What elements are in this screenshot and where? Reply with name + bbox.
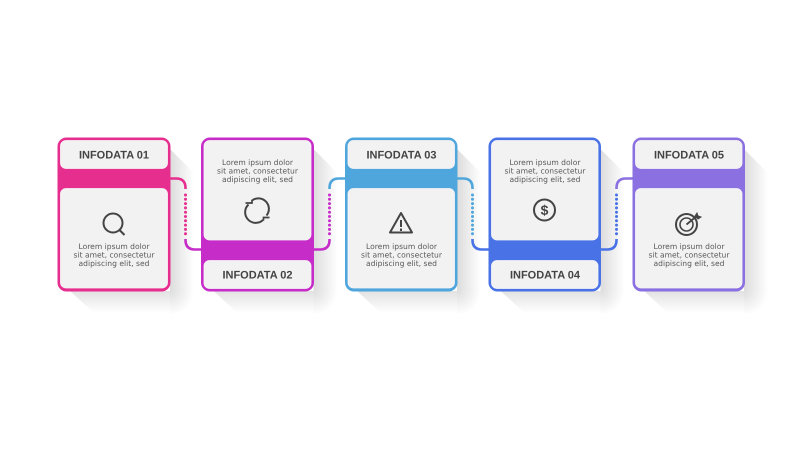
connector: 02 to 03 [313, 178, 346, 250]
text 04: adipiscing elit, sed [510, 175, 581, 184]
connector: 04 to 05 [600, 178, 633, 250]
text 03: Lorem ipsum dolor [366, 242, 438, 251]
panel: infodata 03 [346, 138, 456, 290]
panel: infodata 02 [202, 138, 313, 290]
icon: dollar coin: $ [541, 202, 549, 218]
heading 01: INFODATA 01 [79, 150, 149, 162]
text 01: Lorem ipsum dolor [78, 242, 150, 251]
text 05: sit amet, consectetur [649, 250, 730, 260]
text 02: Lorem ipsum dolor [222, 158, 294, 167]
panel: infodata 01 [58, 138, 170, 290]
text 03: sit amet, consectetur [361, 250, 443, 260]
icon: refresh [245, 198, 270, 223]
text 02: adipiscing elit, sed [222, 175, 293, 184]
text 02: sit amet, consectetur [217, 166, 299, 176]
text 01: adipiscing elit, sed [79, 259, 150, 268]
heading 02: INFODATA 02 [222, 270, 293, 282]
connector: 01 to 02 [170, 178, 202, 250]
icon: magnifier [104, 214, 124, 235]
heading 05: INFODATA 05 [654, 150, 724, 162]
text 03: adipiscing elit, sed [366, 259, 437, 268]
text 01: sit amet, consectetur [74, 250, 155, 260]
text 04: Lorem ipsum dolor [509, 158, 581, 167]
icon: warning [390, 213, 412, 232]
text 04: sit amet, consectetur [505, 166, 586, 176]
icon: dollar coin [534, 200, 555, 220]
text 05: adipiscing elit, sed [654, 259, 725, 268]
panel: infodata 05 [634, 138, 744, 290]
text 05: Lorem ipsum dolor [653, 242, 725, 251]
heading 03: INFODATA 03 [366, 150, 437, 162]
icon: target [676, 213, 701, 235]
shadows [70, 149, 768, 315]
panel: infodata 04 [490, 138, 600, 290]
heading 04: INFODATA 04 [510, 270, 581, 282]
connector: 03 to 04 [457, 178, 489, 250]
